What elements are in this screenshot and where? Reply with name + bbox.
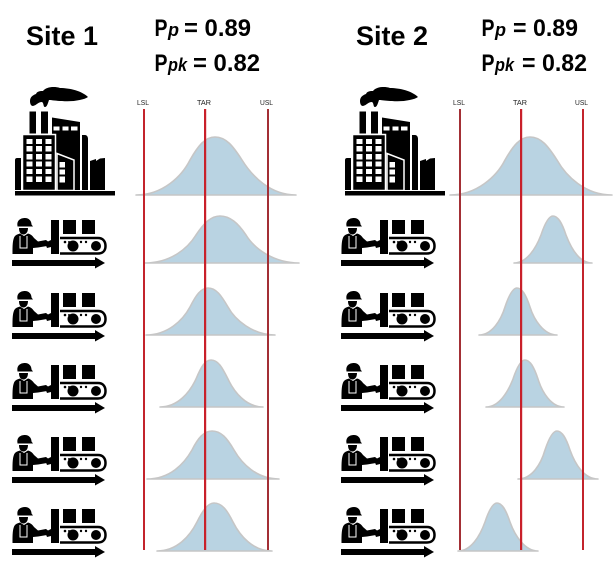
curve: line 1	[145, 216, 299, 263]
metric: Ppk value: pk	[494, 55, 515, 75]
metric: Pp value	[482, 15, 578, 42]
metric: Pp value: p	[167, 20, 179, 40]
icon: production line 4	[12, 435, 106, 486]
icon: factory	[345, 87, 445, 196]
chart: Site 1 distributions	[136, 100, 299, 551]
curve: line 4	[147, 431, 279, 479]
metric: Pp value	[154, 15, 251, 42]
curve: line 3	[160, 360, 263, 407]
metric: Ppk value: pk	[167, 55, 188, 75]
icon: production line 5	[341, 507, 434, 558]
curve: line 2	[479, 288, 557, 335]
label: LSL: LSL	[453, 100, 465, 107]
icon: production line 2	[341, 291, 434, 342]
metric: Pp value: P	[154, 15, 168, 42]
limit line: LSL	[143, 109, 145, 550]
heading: Site 2: Site 2	[356, 21, 428, 51]
label: LSL: LSL	[137, 100, 149, 107]
icon: production line 3	[341, 363, 434, 414]
limit line: USL	[267, 109, 269, 550]
curve: line 3	[486, 360, 564, 407]
limit line: TAR	[520, 109, 522, 550]
icon: production line 2	[12, 291, 106, 342]
chart: Site 2 distributions	[450, 100, 612, 551]
curve: line 1	[514, 216, 592, 263]
icon: production line 5	[12, 507, 106, 558]
curve: line 2	[146, 288, 275, 335]
icon: production line 4	[341, 435, 434, 486]
label: USL: USL	[260, 100, 273, 107]
icon: production line 1	[12, 218, 106, 268]
metric: Ppk value: = 0.82	[522, 50, 587, 77]
metric: Ppk value	[482, 50, 587, 77]
label: TAR: TAR	[513, 100, 527, 107]
curve: line 5	[157, 503, 272, 551]
label: TAR: TAR	[197, 100, 211, 107]
metric: Pp value: P	[482, 15, 494, 42]
label: USL: USL	[575, 100, 588, 107]
curve: line 4	[518, 431, 598, 479]
curve: site overall	[450, 137, 612, 195]
panel: Site 1	[12, 15, 299, 558]
metric: Pp value: = 0.89	[513, 15, 578, 42]
limit line: TAR	[204, 109, 206, 550]
heading: Site 1: Site 1	[26, 21, 98, 51]
limit line: USL	[582, 109, 584, 550]
icon: factory	[15, 87, 115, 196]
curve: site overall	[136, 137, 296, 195]
curve: line 5	[458, 503, 538, 551]
icon: production line 1	[341, 218, 434, 268]
limit line: LSL	[459, 109, 461, 550]
metric: Pp value: = 0.89	[184, 15, 251, 42]
metric: Ppk value: P	[154, 50, 168, 77]
metric: Ppk value: = 0.82	[193, 50, 260, 77]
metric: Ppk value	[154, 50, 260, 77]
metric: Ppk value: P	[482, 50, 494, 77]
icon: production line 3	[12, 363, 106, 414]
metric: Pp value: p	[494, 20, 506, 40]
panel: Site 2	[341, 15, 612, 558]
